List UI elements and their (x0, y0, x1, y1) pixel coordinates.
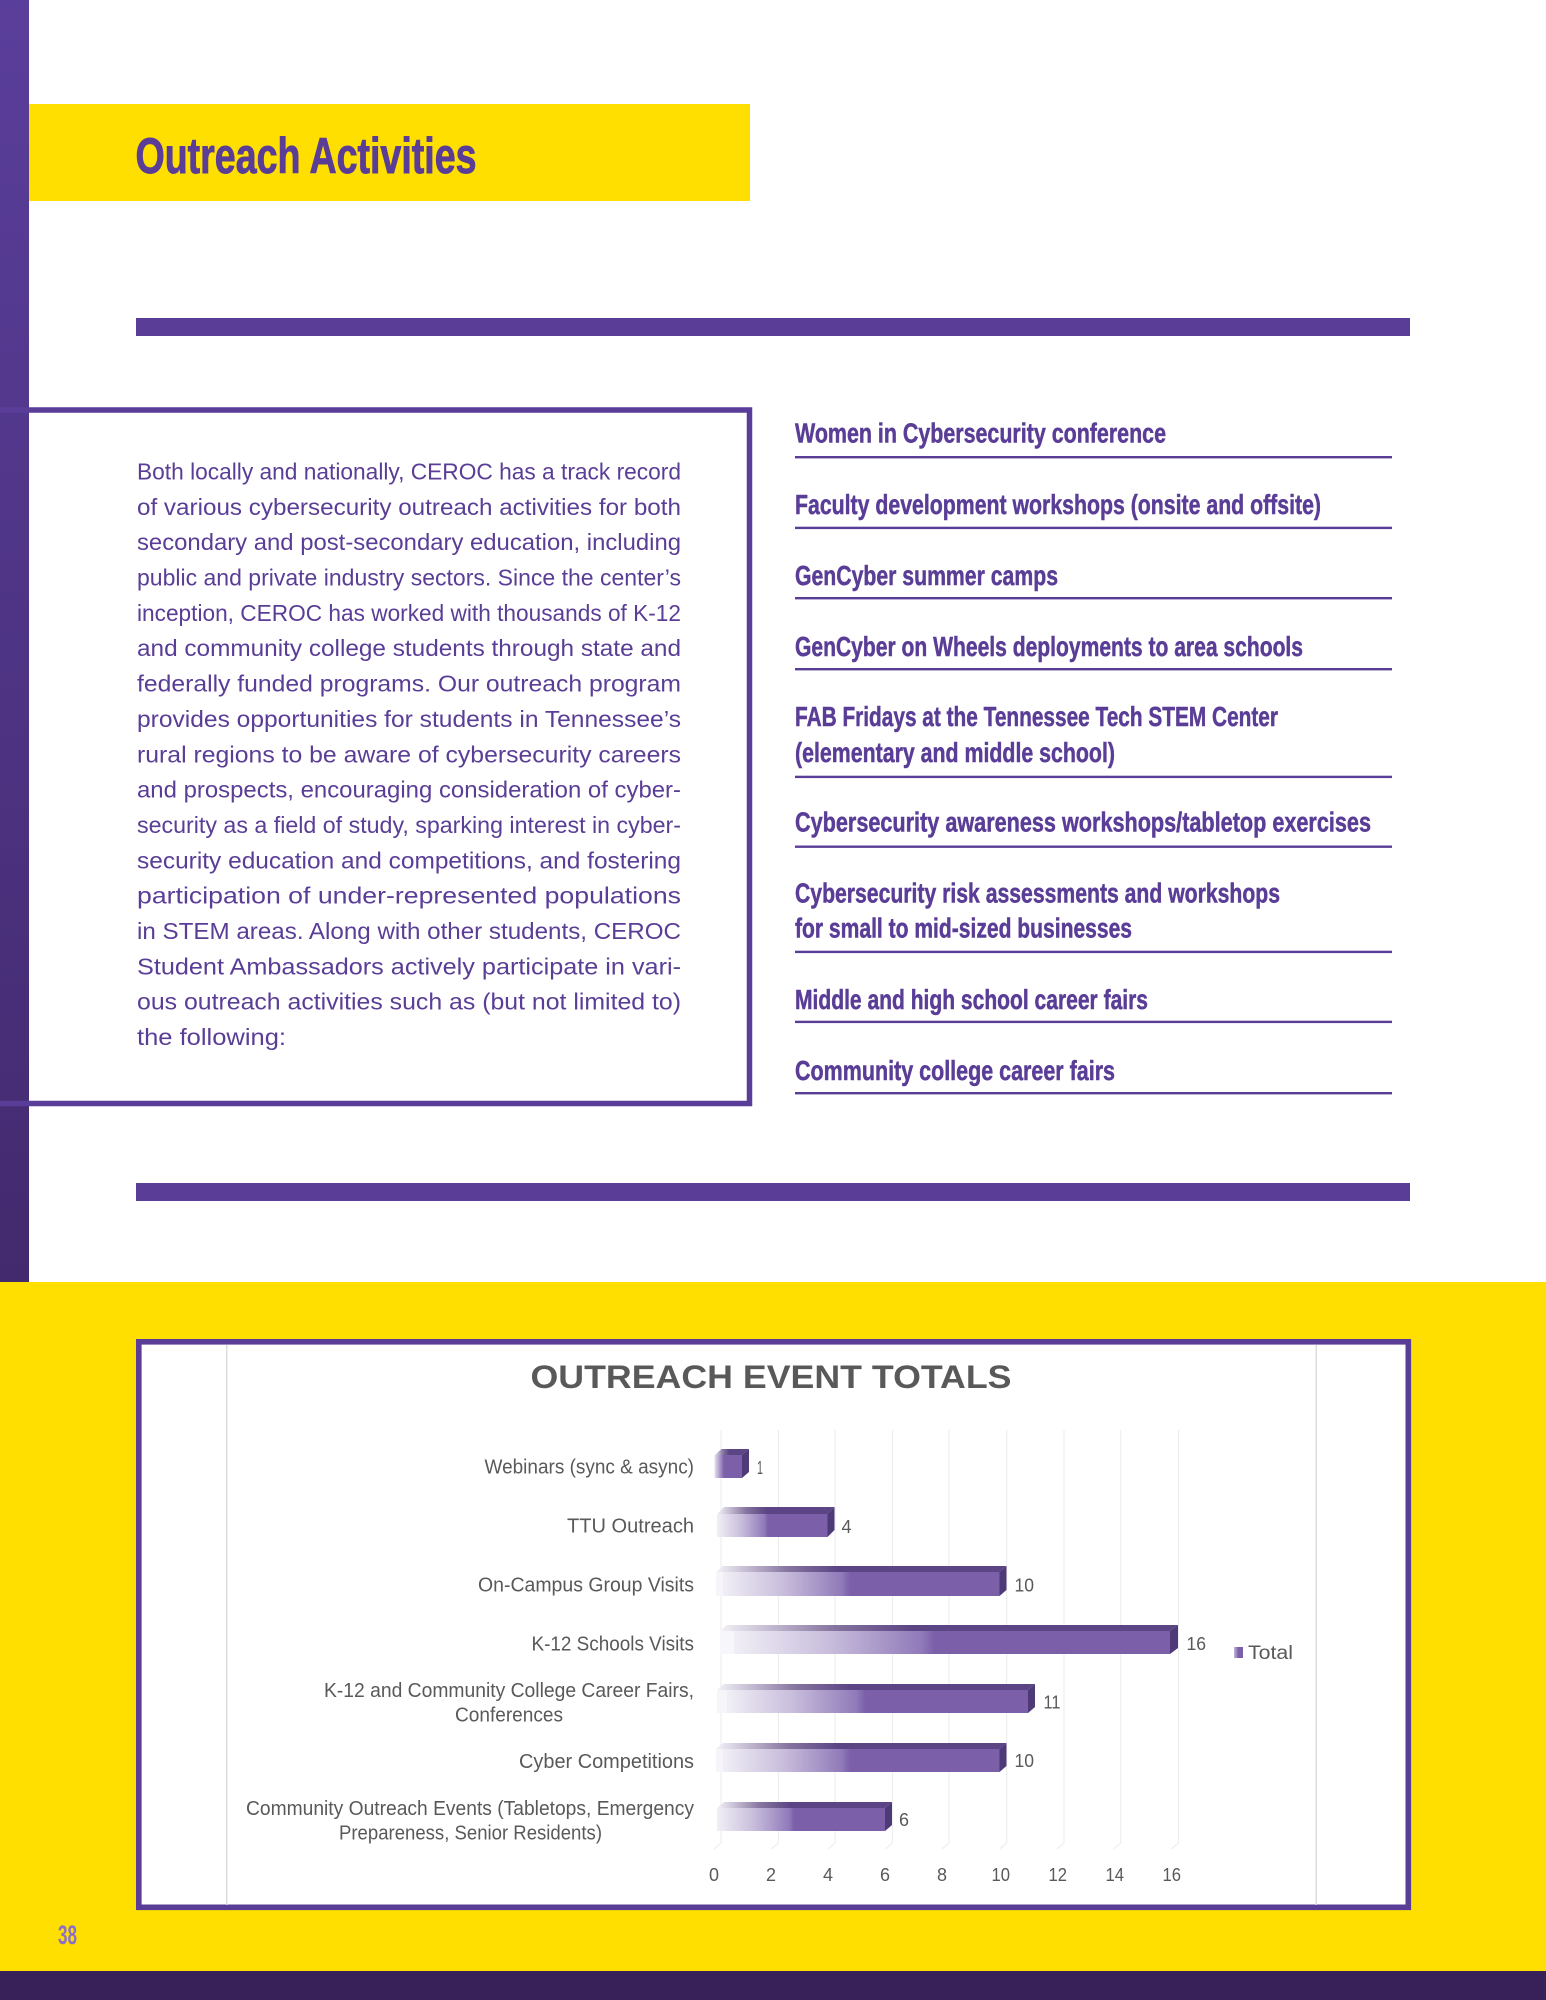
bar: on-campus group visits 10 (716, 1566, 1006, 1596)
intro paragraph: security as a field of study, sparking interest in cyber- (137, 812, 681, 838)
intro paragraph: security education and competitions, and fostering (137, 847, 681, 873)
bar: career fairs 11 (717, 1684, 1035, 1713)
value labels: 6 (899, 1809, 909, 1830)
x axis labels (709, 1864, 1181, 1885)
intro paragraph (137, 458, 681, 1050)
intro paragraph: ous outreach activities such as (but not limited to) (137, 989, 681, 1015)
category labels: On-Campus Group Visits (478, 1574, 694, 1596)
list item: awareness workshops: Cybersecurity awareness workshops/tabletop exercises (795, 807, 1371, 838)
category labels: Conferences (455, 1704, 563, 1726)
category labels (246, 1456, 694, 1844)
category labels: Cyber Competitions (519, 1751, 694, 1773)
left sidebar (0, 0, 29, 1282)
panel: activities list (795, 418, 1392, 1094)
bar: webinars 1 (714, 1449, 749, 1478)
legend: Total (1248, 1643, 1293, 1664)
x axis labels: 0 (709, 1864, 719, 1885)
list item: women in cybersecurity: Women in Cybersecurity conference (795, 418, 1166, 449)
intro paragraph: and prospects, encouraging consideration of cyber- (137, 777, 681, 803)
intro paragraph: rural regions to be aware of cybersecurity careers (137, 741, 681, 767)
intro paragraph: participation of under-represented populations (137, 883, 681, 909)
value labels: 11 (1044, 1692, 1060, 1712)
list item: risk assessments: Cybersecurity risk assessments and workshops (795, 878, 1280, 909)
list item: fab fridays (795, 701, 1392, 778)
bar: cyber competitions 10 (716, 1743, 1006, 1772)
category labels: Webinars (sync & async) (484, 1456, 694, 1478)
bar: community outreach 6 (717, 1802, 892, 1831)
dark footer strip (0, 1971, 1546, 2000)
intro paragraph: of various cybersecurity outreach activities for both (137, 494, 681, 520)
intro paragraph: public and private industry sectors. Since the center’s (137, 564, 681, 590)
list item: career fairs: Middle and high school career fairs (795, 984, 1148, 1015)
page number: 38 (58, 1920, 77, 1950)
value labels: 4 (842, 1516, 852, 1537)
intro paragraph: Student Ambassadors actively participate in vari- (137, 953, 681, 979)
category labels: Prepareness, Senior Residents) (339, 1822, 602, 1844)
title: Outreach Activities (136, 128, 476, 184)
x axis labels: 2 (766, 1864, 776, 1885)
intro paragraph: Both locally and nationally, CEROC has a track record (137, 458, 681, 484)
panel: bar chart (139, 1342, 1408, 1907)
x axis labels: 8 (937, 1864, 947, 1885)
intro paragraph: inception, CEROC has worked with thousands of K-12 (137, 600, 681, 626)
intro paragraph: secondary and post-secondary education, including (137, 529, 681, 555)
list item: fab fridays: (elementary and middle school) (795, 737, 1115, 768)
x axis labels: 12 (1048, 1864, 1067, 1885)
value labels: 1 (757, 1457, 763, 1478)
chart title: OUTREACH EVENT TOTALS (530, 1359, 1012, 1395)
gridlines (714, 1430, 1178, 1849)
value labels: 16 (1186, 1633, 1206, 1654)
list item: faculty workshops: Faculty development workshops (onsite and offsite) (795, 489, 1321, 520)
intro paragraph: federally funded programs. Our outreach program (137, 671, 681, 697)
yellow footer band (0, 1282, 1546, 1971)
category labels: Community Outreach Events (Tabletops, Emergency (246, 1798, 694, 1820)
category labels: TTU Outreach (567, 1516, 694, 1538)
list item: fab fridays: FAB Fridays at the Tennessee Tech STEM Center (795, 701, 1278, 732)
list item: gencyber camps: GenCyber summer camps (795, 560, 1058, 591)
x axis labels: 4 (823, 1864, 833, 1885)
x axis labels: 6 (880, 1864, 890, 1885)
bar: k-12 schools visits 16 (720, 1625, 1178, 1654)
x axis labels: 10 (992, 1864, 1010, 1885)
value labels: 10 (1014, 1574, 1034, 1596)
bar: ttu outreach 4 (717, 1507, 834, 1537)
intro paragraph: the following: (137, 1024, 286, 1050)
list item: risk assessments: for small to mid-sized businesses (795, 913, 1132, 944)
legend (1234, 1643, 1293, 1664)
top divider bar (136, 318, 1410, 336)
bottom divider bar (136, 1183, 1410, 1201)
category labels: K-12 and Community College Career Fairs, (324, 1680, 694, 1702)
intro paragraph: in STEM areas. Along with other students, CEROC (137, 918, 681, 944)
intro paragraph: provides opportunities for students in Tennessee’s (137, 706, 681, 732)
title banner (29, 104, 750, 201)
list item: risk assessments (795, 878, 1392, 953)
panel: intro text box (0, 410, 750, 1104)
list item: gencyber on wheels: GenCyber on Wheels deployments to area schools (795, 631, 1303, 662)
category labels: K-12 Schools Visits (532, 1634, 694, 1656)
x axis labels: 16 (1162, 1864, 1181, 1885)
value labels (757, 1457, 1206, 1830)
intro paragraph: and community college students through state and (137, 635, 681, 661)
value labels: 10 (1014, 1750, 1034, 1771)
list item: community college: Community college career fairs (795, 1055, 1115, 1086)
x axis labels: 14 (1106, 1864, 1124, 1885)
